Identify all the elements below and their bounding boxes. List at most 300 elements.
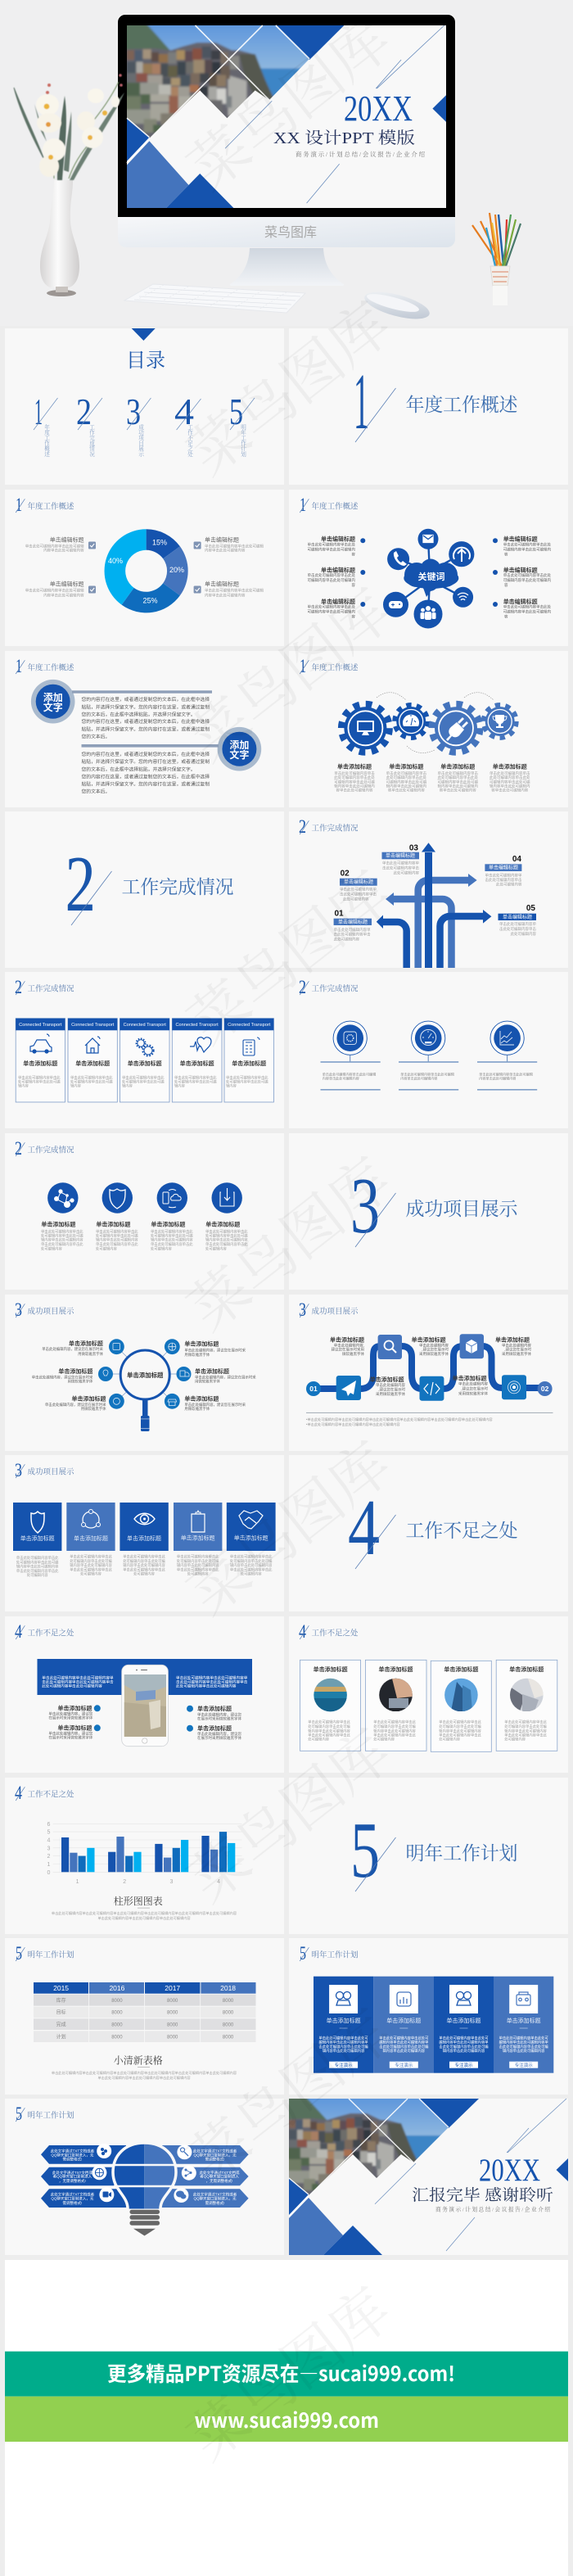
tile: eye: 处可编辑内容单击此处可编 (123, 1558, 165, 1564)
gear: gauge (395, 705, 427, 738)
right labels: 单击此处编辑内容，建议您在展示时采 (195, 1375, 256, 1381)
data table: 目标 (56, 2009, 66, 2016)
card: calculator: Connected Transport (228, 1023, 271, 1028)
panel 1 (314, 1977, 373, 2073)
left labels: 单击此处可编辑内容单击此处 (308, 572, 355, 578)
header (16, 2104, 74, 2124)
tile: eye: 单击此处可编辑内容单击此 (123, 1554, 165, 1560)
label 04: 单击编辑标题 (489, 865, 518, 871)
header: 明年工作计划 (311, 1950, 359, 1960)
tile: eye: 辑内容单击此处可编辑内容 (123, 1562, 165, 1568)
tile: shield: 处可编辑内容单击此处可编 (16, 1559, 58, 1565)
photo card 3: 处可编辑内容 (439, 1737, 461, 1742)
header: 5 (16, 1943, 22, 1964)
left labels (25, 536, 96, 598)
slide: section 3 (289, 1133, 568, 1290)
data table: 8000 (223, 2011, 234, 2016)
panel 3: 辑内容单击此处可编辑内容 (443, 2048, 485, 2054)
header: 工作完成情况 (28, 984, 74, 994)
donut chart: 25% (142, 597, 158, 605)
card: heartbeat: 单击添加标题 (180, 1060, 214, 1067)
lower labels (370, 1374, 488, 1397)
tile: shield: 单击此处可编辑内容单击此 (16, 1568, 59, 1574)
promo headline: 更多精品PPT资源尽在—sucai999.com! (107, 2358, 455, 2388)
section number: 4 (348, 1484, 380, 1572)
header: 1 (16, 656, 22, 676)
slide: table of contents (5, 328, 284, 485)
column: download: 辑内容单击此处可编辑内容 (205, 1237, 248, 1243)
right arrow copy (193, 2148, 240, 2206)
photo card 3: 处可编辑内容单击此处可编 (439, 1724, 481, 1729)
contents numbers: 3 (126, 391, 141, 432)
bar chart: 6 (47, 1822, 50, 1828)
column: download: 处可编辑内容 (205, 1245, 227, 1251)
footnote (306, 1412, 553, 1427)
photo card 1 (300, 1660, 360, 1751)
tile: clipboard: 处可编辑内容 (187, 1570, 209, 1576)
upper labels: 单击此处编辑内容, (334, 1342, 364, 1348)
header: 成功项目展示 (311, 1307, 359, 1317)
right arrow copy: ，无需调整格式! (206, 2178, 232, 2184)
label 03: 此处可编辑内容 (393, 870, 419, 875)
gear labels: 容单击此处可编辑内容 (388, 788, 425, 793)
panel 2: 单击添加标题 (386, 2017, 421, 2024)
tile: cycle: 单击此处可编辑内容单击此 (70, 1554, 112, 1560)
step: search (378, 1335, 402, 1359)
gear: trophy (484, 705, 517, 738)
header: 工作完成情况 (311, 984, 359, 994)
step: cube (460, 1334, 484, 1358)
header: 工作不足之处 (28, 1628, 74, 1638)
start node (306, 1381, 321, 1396)
label 04: 击此处可编辑内容单击 (485, 877, 522, 883)
data table: 库存 (56, 1997, 66, 2004)
photo card 2: 单击此处可编辑内容单击此 (373, 1720, 417, 1725)
header: 年度工作概述 (311, 663, 359, 673)
slide: section 4 (289, 1455, 568, 1611)
title rule (138, 2066, 150, 2068)
data table: 8000 (111, 2022, 123, 2027)
tile: eye: 单击添加标题 (127, 1534, 161, 1542)
label 01: 击此处可编辑内容单击 (334, 932, 371, 938)
table title: 小清新表格 (114, 2054, 163, 2067)
photo card 3: 单击此处可编辑内容单击此 (439, 1733, 482, 1738)
left labels: 容 (352, 582, 355, 588)
watermarks: 菜鸟图库 (168, 847, 405, 1060)
card: gears (120, 1019, 169, 1102)
left labels: 单击编辑标题 (321, 567, 355, 573)
divider bar two (82, 744, 219, 748)
contents numbers (34, 391, 243, 432)
gear labels: 单击此处可编辑内容单击 (490, 771, 530, 776)
left arrow copy: ，无需调整格式! (59, 2178, 86, 2184)
badge one: 添加 (43, 691, 63, 703)
right labels: 单击此处可编辑内容单击此处 (503, 541, 552, 547)
panel 1: 编辑内容单击此处可编辑内容单 (319, 2040, 368, 2045)
panel 3: 击此处可编辑内容单击此处可编 (439, 2044, 489, 2050)
column: cloud sync (151, 1182, 193, 1251)
column: cloud sync: 辑内容单击此处可编辑内容 (151, 1237, 193, 1243)
label 05: 击此处可编辑内容单击 (499, 926, 536, 932)
section slash (355, 388, 396, 442)
label 03 (381, 843, 419, 875)
pin: gauge (399, 1021, 458, 1091)
panel 2 (373, 1977, 434, 2073)
panel 3: 编辑内容单击此处可编辑内容单 (439, 2040, 489, 2045)
slide: three pins (289, 972, 568, 1128)
right labels: 可编辑内容单击此处可编辑内 (503, 546, 552, 552)
slide: section 5 (289, 1778, 568, 1934)
icon: top triangle (132, 328, 156, 341)
lower labels: ,建议您在展示时 (461, 1386, 488, 1392)
left arrow icons (92, 2144, 114, 2202)
lower labels: 采用微软雅黑字体 (458, 1390, 488, 1396)
pencil cup (472, 213, 521, 305)
right labels: 单击添加标题 (184, 1340, 219, 1348)
header: 工作完成情况 (311, 824, 359, 834)
blue banner: 击此处可编辑内容单击此处可编辑内容单击 (42, 1679, 114, 1685)
left labels: 单击此处编辑内容，建议您在展示时采 (32, 1375, 93, 1381)
chart title: 柱形图图表 (114, 1895, 163, 1907)
left arrow copy: 此处文字通过TXT文档或者 (51, 2191, 95, 2197)
tile: handshake: 处可编辑内容单击此处可编 (230, 1558, 272, 1564)
header: 年度工作概述 (28, 663, 74, 673)
header: 5 (16, 2104, 22, 2124)
header (299, 1621, 359, 1642)
column: molecule (41, 1182, 83, 1251)
photo card 1: 处可编辑内容 (308, 1737, 330, 1742)
left labels: 内容单击此处可编辑内容 (43, 592, 84, 598)
section title: 工作不足之处 (406, 1521, 517, 1541)
badge one (31, 680, 75, 724)
contents labels: 年度工作概述 (43, 423, 50, 458)
vase with orchids (14, 74, 124, 296)
column: shield: 处可编辑内容单击此处可编 (96, 1233, 138, 1239)
blue banner: 击此处可编辑内容单击此处可编辑内容单击 (176, 1679, 248, 1685)
gear labels: 单击此处可编辑内容单击 (438, 771, 479, 776)
header (15, 1299, 74, 1320)
paragraph one: 粘贴，并选择只保留文字。您的内容打在这里，或者通过复制 (82, 725, 210, 732)
data table (34, 1982, 255, 2042)
header: 1 (300, 656, 306, 676)
lower labels: 单击添加标题 (453, 1374, 487, 1382)
column: cloud sync: 处可编辑内容 (151, 1245, 172, 1251)
bar chart: 2 (47, 1854, 50, 1860)
watermarks: 菜鸟图库 (168, 0, 405, 206)
left labels: 单击此处编辑内容，建议您 (48, 1711, 93, 1717)
pin: gauge: 单击此处可编辑内容单击此处可编辑 (400, 1071, 454, 1076)
gear labels: 辑内容单击此处可编辑内 (334, 784, 375, 789)
right arrow copy: 者QQ聊天窗口复制进入 (200, 2174, 239, 2180)
right labels: 可编辑内容单击此处可编辑内 (503, 608, 552, 614)
column: shield: 单击添加标题 (96, 1220, 130, 1228)
bar chart: 1 (76, 1879, 79, 1885)
icon: wifi (458, 593, 468, 600)
donut chart: 40% (108, 557, 123, 565)
badge two (218, 727, 261, 771)
label 02: 单击此处可编辑内容单 (340, 887, 377, 893)
photo card 2: 单击此处可编辑内容单击此 (373, 1733, 417, 1738)
watermarks: 菜鸟图库 (168, 565, 405, 778)
icon: mail (423, 536, 433, 542)
header: 2 (299, 816, 306, 837)
gear labels: 此处可编辑内容单击此处 (490, 775, 530, 780)
data table: 8000 (167, 2022, 178, 2027)
header (15, 1621, 74, 1642)
contents labels: 工作完成情况 (88, 424, 95, 458)
column: cloud sync: 单击添加标题 (151, 1220, 185, 1228)
panel 3: 单击此处可编辑内容单击此处可 (439, 2036, 489, 2041)
tile: eye: 处可编辑内容 (133, 1570, 156, 1576)
right labels: 在展示时采用微软雅黑字体 (197, 1715, 241, 1721)
arrow 04 (418, 874, 477, 968)
panel 1: 专注演示 (335, 2062, 353, 2068)
column: molecule: 单击此处可编辑内容单击此 (41, 1229, 83, 1235)
tile: clipboard: 单击此处可编辑内容单击此 (177, 1554, 219, 1560)
slide: light bulb (5, 2099, 284, 2255)
label 05: 05 (526, 904, 535, 913)
bar chart: 3 (47, 1846, 50, 1851)
slide: bar chart (5, 1778, 284, 1934)
paragraph two: 粘贴，并选择只保留文字。您的内容打在这里，或者通过复制 (82, 758, 210, 765)
data table: 8000 (167, 1999, 178, 2004)
right labels: 单击此处编辑内容，建议您 (197, 1711, 241, 1717)
start node: 01 (309, 1385, 318, 1393)
right labels: 可编辑内容单击此处可编辑内 (503, 577, 552, 583)
paragraph one: 您的内容打在这里，或者通过复制您的文本后，在此框中选择 (82, 718, 210, 725)
slide: four circles (5, 1133, 284, 1290)
upper labels: ,建议您在展示时 (422, 1346, 449, 1352)
column: cloud sync: 单击此处可编辑内容单击此 (151, 1229, 193, 1235)
photo card 3: 单击添加标题 (444, 1665, 478, 1673)
magnifier (106, 1347, 183, 1431)
pin: settings: 单击此处可编辑内容单击此处可编辑 (323, 1071, 376, 1076)
network diagram (383, 529, 474, 629)
panel 2: 单击此处可编辑内容单击此处可 (379, 2036, 429, 2041)
right labels (493, 536, 552, 619)
right labels: 单击编辑标题 (503, 567, 538, 573)
photo card 1: 辑内容单击此处可编辑内容 (308, 1728, 351, 1733)
header (16, 495, 74, 515)
right labels: 单击添加标题 (197, 1724, 232, 1732)
header: 2 (15, 1138, 22, 1159)
header: 工作不足之处 (311, 1628, 359, 1638)
right labels: 内容单击此处可编辑内容 (205, 547, 246, 553)
watermarks (168, 0, 405, 2477)
card: gears: Connected Transport (124, 1023, 166, 1028)
label 01: 单击此处可编辑内容单 (334, 927, 371, 933)
label 02: 单击编辑标题 (344, 879, 373, 885)
gear: monitor (341, 704, 389, 752)
magnifier: 单击添加标题 (127, 1372, 164, 1379)
left labels: 单击编辑标题 (50, 536, 84, 544)
icon: gamepad (389, 601, 403, 608)
right labels: 容 (504, 582, 508, 588)
label 05: 单击编辑标题 (503, 914, 532, 920)
header: 工作完成情况 (28, 1145, 74, 1155)
slide: photo cards (289, 1616, 568, 1773)
panel 4: 专注演示 (515, 2062, 533, 2068)
blue banner: 单击此处可编辑内容单击此处可编辑内容单 (42, 1675, 114, 1681)
column: molecule: 处可编辑内容 (41, 1245, 62, 1251)
lower labels: 采用微软雅黑字体 (376, 1391, 405, 1397)
label 03: 单击编辑标题 (386, 852, 415, 859)
slide: phone mockup (5, 1616, 284, 1773)
keyboard (124, 284, 305, 313)
left labels: 可编辑内容单击此处可编辑内 (308, 608, 355, 614)
label 03: 击此处可编辑内容单击 (382, 865, 419, 871)
header: 明年工作计划 (28, 2111, 74, 2121)
donut chart: 20% (169, 566, 184, 574)
section slash (355, 1515, 396, 1569)
column: shield: 单击此处可编辑内容单击此 (96, 1229, 138, 1235)
section slash (355, 1837, 396, 1891)
panel 1: 辑内容单击此处可编辑内容 (323, 2048, 365, 2054)
card: house: 单击添加标题 (75, 1060, 110, 1067)
left labels: 单击此处编辑内容，建议您在展示时采 (45, 1402, 106, 1408)
mouse (362, 287, 432, 324)
contents numbers: 2 (76, 391, 92, 432)
gear labels: 单击此处可编辑内容单击 (386, 771, 427, 776)
left labels: 单击添加标题 (57, 1724, 92, 1731)
header: 年度工作概述 (311, 501, 359, 511)
tile: cycle (66, 1503, 115, 1576)
section number: 3 (350, 1162, 380, 1250)
gear labels: 可编辑内容单击此处可编 (386, 779, 427, 784)
watermarks: 菜鸟图库 (168, 1418, 405, 1631)
header: 4 (15, 1783, 22, 1803)
card: calculator: 单击此处可编辑内容单击此 (226, 1074, 268, 1080)
badge two: 文字 (229, 748, 249, 761)
panel 3 (434, 1977, 494, 2073)
card: calculator (224, 1019, 273, 1102)
watermarks: 菜鸟图库 (168, 1986, 405, 2199)
pin: chart (477, 1021, 537, 1091)
paragraph two: 您的内容打在这里，或者通过复制您的文本后，在此框中选择 (82, 773, 210, 780)
left labels: 单击添加标题 (58, 1367, 92, 1375)
tile: handshake: 单击此处可编辑内容单击此 (230, 1566, 273, 1572)
footnote: •单击此处可编辑内容单击此处可编辑内容单击此处可编辑内容 (306, 1421, 400, 1427)
header: 3 (15, 1299, 22, 1320)
right labels: 单击添加标题 (197, 1705, 232, 1712)
pin: settings: 内容单击此处可编辑内容 (323, 1076, 359, 1081)
contents slashes (34, 398, 255, 430)
left arrow copy (51, 2148, 95, 2206)
arrow 02 (386, 893, 452, 968)
gear labels: 此处可编辑内容单击此处 (334, 775, 375, 780)
header: 4 (299, 1621, 306, 1642)
panel 1: 单击此处可编辑内容单击此处可 (319, 2036, 368, 2041)
tile: clipboard: 辑内容单击此处可编辑内容 (177, 1562, 219, 1568)
gear labels: 容单击此处可编辑内容 (336, 788, 373, 793)
right labels: 用微软雅黑字体 (184, 1406, 210, 1412)
right labels: 单击编辑标题 (503, 536, 538, 542)
panel 2: 编辑内容单击此处可编辑内容单 (379, 2040, 429, 2045)
panel 2: 击此处可编辑内容单击此处可编 (379, 2044, 428, 2050)
header (299, 1299, 359, 1320)
satellite icons (98, 1339, 192, 1409)
data table: 8000 (167, 2011, 178, 2016)
right arrow copy: QQ聊天窗口复制进入，无 (193, 2195, 237, 2201)
label 04: 单击此处可编辑内容单 (485, 872, 522, 878)
card: house: 辑内容 (70, 1082, 82, 1088)
right labels: 容 (504, 551, 508, 557)
right labels: 用微软雅黑字体 (184, 1352, 210, 1358)
tile: eye: 单击此处可编辑内容单击此 (123, 1566, 165, 1572)
label 02: 击此处可编辑内容单击 (340, 891, 377, 897)
header (16, 1943, 74, 1964)
label 01 (334, 909, 372, 942)
contents numbers: 1 (34, 391, 43, 432)
card: heartbeat: 处可编辑内容单击此处可编 (174, 1078, 217, 1084)
label 04: 04 (512, 855, 521, 864)
badge two: 添加 (229, 739, 249, 751)
end node: 02 (541, 1385, 549, 1393)
header: 1 (300, 495, 306, 515)
gear labels: 辑内容单击此处可编辑内 (386, 784, 427, 789)
gear labels: 容单击此处可编辑内容 (491, 788, 529, 793)
left arrows (41, 2145, 129, 2208)
slide: magnifier (5, 1295, 284, 1451)
card: car: 辑内容 (18, 1082, 29, 1088)
gear labels: 可编辑内容单击此处可编 (438, 779, 479, 784)
label 03: 单击此处可编辑内容单 (382, 861, 419, 866)
slide: keyword network (289, 490, 568, 646)
arrow 05 (440, 910, 491, 968)
tile: handshake: 辑内容单击此处可编辑内容 (230, 1562, 273, 1568)
tile: shield: 单击此处可编辑内容单击此 (16, 1555, 59, 1561)
section number: 5 (350, 1806, 380, 1895)
slide: text with circles (5, 651, 284, 807)
left labels: 在展示时采用微软雅黑字体 (48, 1715, 93, 1721)
right labels: 用微软雅黑字体 (195, 1379, 220, 1385)
bulb (113, 2143, 176, 2235)
data table: 8000 (223, 1999, 234, 2004)
photo card 1: 单击添加标题 (314, 1665, 348, 1673)
slide: section 1 (289, 328, 568, 485)
header (299, 816, 359, 837)
slide: donut chart (5, 490, 284, 646)
left labels: 单击编辑标题 (50, 580, 84, 588)
right labels: 单击编辑标题 (205, 580, 239, 588)
header (16, 656, 74, 676)
column: shield (96, 1182, 138, 1251)
label 02: 此处可编辑内容 (343, 896, 369, 902)
header: 5 (300, 1943, 306, 1964)
table note: 单击此处可编辑内容单击此处可编辑内容单击此处可编辑内容 (97, 2075, 191, 2081)
bar chart: 3 (169, 1879, 173, 1885)
data table: 8000 (111, 2035, 123, 2040)
watermarks: 菜鸟图库 (168, 2264, 405, 2477)
column: download: 处可编辑内容单击此处可编 (205, 1233, 248, 1239)
gear labels: 可编辑内容单击此处可编 (490, 779, 530, 784)
tile: cycle: 单击此处可编辑内容单击此 (70, 1566, 112, 1572)
upper labels: 单击添加标题 (330, 1336, 364, 1343)
blue banner (38, 1659, 252, 1695)
promo band lime (5, 2397, 568, 2442)
section title: 明年工作计划 (406, 1843, 517, 1864)
slide: table (5, 1938, 284, 2095)
upper labels: 单击添加标题 (495, 1336, 530, 1343)
upper labels: 单击添加标题 (412, 1336, 446, 1343)
left labels: 可编辑内容单击此处可编辑内 (308, 577, 355, 583)
upper labels: 建议您在展示时采用 (331, 1346, 364, 1352)
column: shield: 单击此处可编辑内容单击此 (96, 1241, 138, 1247)
column: molecule: 处可编辑内容单击此处可编 (41, 1233, 83, 1239)
step: target (502, 1375, 526, 1399)
tile: handshake: 处可编辑内容 (241, 1570, 262, 1576)
monitor mockup (117, 14, 456, 286)
